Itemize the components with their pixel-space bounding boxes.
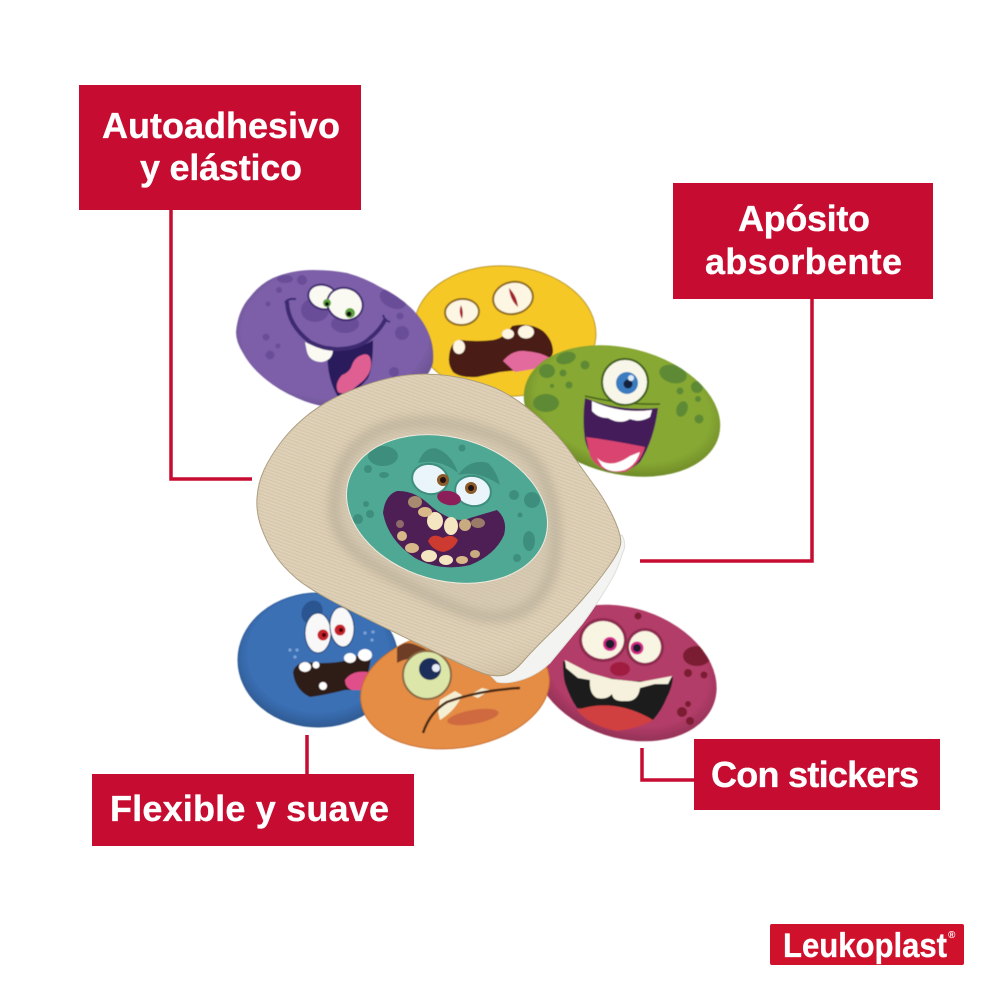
bandage xyxy=(257,374,621,676)
sticker: purple monster xyxy=(235,269,434,406)
label box: Apósito absorbente xyxy=(673,183,933,299)
connector line: Flexible xyxy=(305,735,309,774)
absorbent pad emboss xyxy=(334,422,556,618)
label box: Apósito absorbente: Apósito xyxy=(738,198,870,239)
label box: Con stickers xyxy=(694,739,940,810)
label box: Apósito absorbente: absorbente xyxy=(705,241,902,282)
connector line: Apósito xyxy=(640,299,812,561)
sticker: teal monster xyxy=(346,434,548,584)
sticker: yellow monster xyxy=(410,260,600,402)
label box: Flexible y suave xyxy=(92,774,414,846)
label box: Autoadhesivo y elástico: y elástico xyxy=(140,147,302,188)
connector line: Autoadhesivo xyxy=(171,210,252,479)
connector line: stickers xyxy=(642,748,694,780)
label box: Con stickers: Con stickers xyxy=(711,754,919,795)
sticker: orange monster xyxy=(353,617,557,761)
bandage body xyxy=(257,374,621,676)
sticker: green monster xyxy=(522,344,722,478)
label box: Flexible y suave: Flexible y suave xyxy=(110,788,389,829)
white release liner xyxy=(490,535,625,683)
label box: Autoadhesivo y elástico xyxy=(79,85,361,210)
sticker: blue monster xyxy=(238,593,398,727)
sticker: magenta monster xyxy=(546,604,718,742)
logo: Leukoplast: ® xyxy=(948,930,956,941)
label box: Autoadhesivo y elástico: Autoadhesivo xyxy=(102,105,340,146)
logo: Leukoplast: Leukoplast xyxy=(783,927,947,965)
